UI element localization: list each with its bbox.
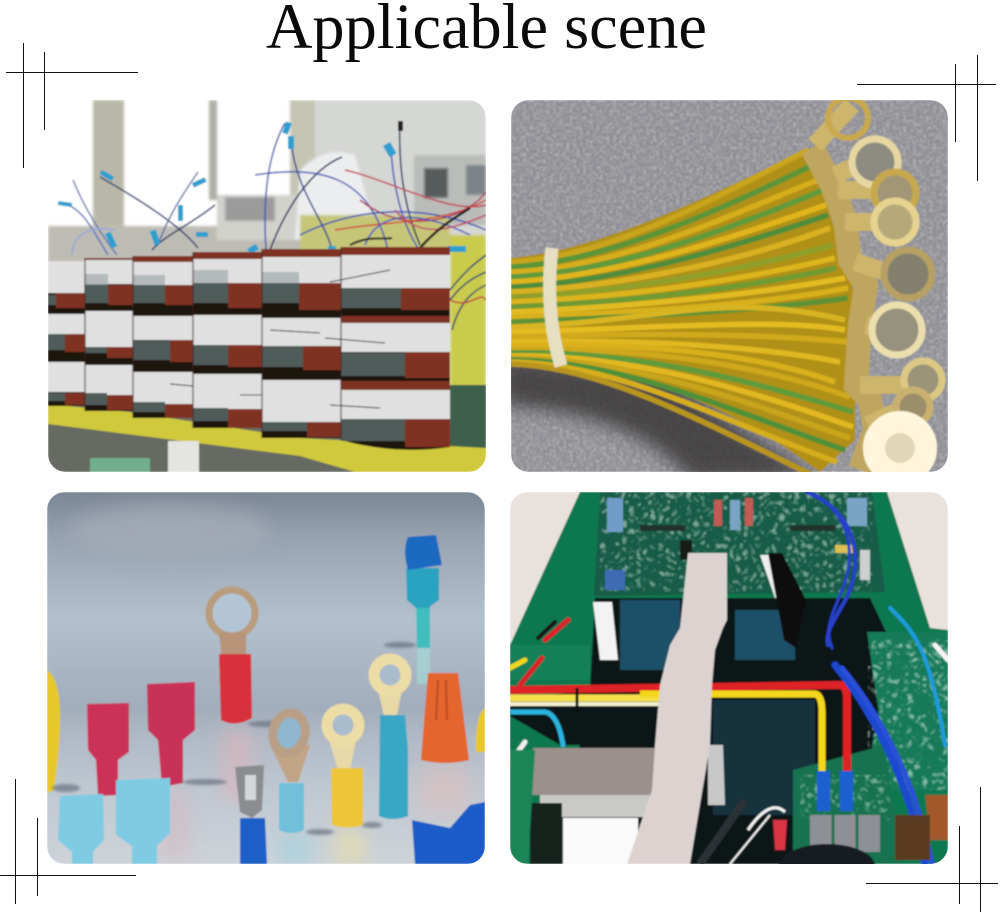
dark chassis interior [510,598,890,864]
top components [605,498,870,590]
corner mark: bottom left [0,779,136,904]
upper circuit boards [594,492,885,596]
crimson connector: large [147,682,195,787]
bundle shadow [500,355,820,480]
crimson connector: small [87,703,129,796]
coil stacks [48,247,450,450]
white parts and black strap [758,554,778,600]
left green board [510,645,590,680]
ring terminal: bronze with light blue sleeve [269,710,310,833]
ring terminal: tall gold with teal sleeve [374,659,408,819]
light blue connector: small [58,794,104,864]
lower components [696,794,948,864]
transformer block [510,745,725,864]
light blue connector: large [116,778,170,864]
shadows [52,642,416,835]
blue spade connectors [817,771,853,811]
corner mark: top left [6,43,138,168]
left wires [510,608,948,760]
panel: assorted insulated crimp terminals photo [47,492,485,865]
panel: yellow-green ground wires with ring terminals photo [500,98,948,480]
background haze and floor reflections [70,504,470,865]
ring terminal: yellow sleeve [327,709,363,828]
ring terminals [812,148,875,470]
cord tie [550,248,561,366]
board frame [510,492,948,864]
ring terminal: red [209,590,255,724]
blue wing connector [412,802,485,864]
red and yellow wires [510,685,847,772]
panel: toroidal transformer coils photo [48,100,486,472]
orange wire nut [421,673,469,763]
yellow edge connectors [47,670,485,793]
spade terminal: blue sleeve [235,765,267,864]
panel: circuit board with wiring photo [510,492,948,888]
corner mark: bottom right [866,787,998,912]
wire bundle [511,148,856,478]
blue wires [807,492,932,864]
blue cap teal connector [405,535,442,684]
ribbon cable [627,553,727,864]
corner mark: top right [857,55,996,181]
